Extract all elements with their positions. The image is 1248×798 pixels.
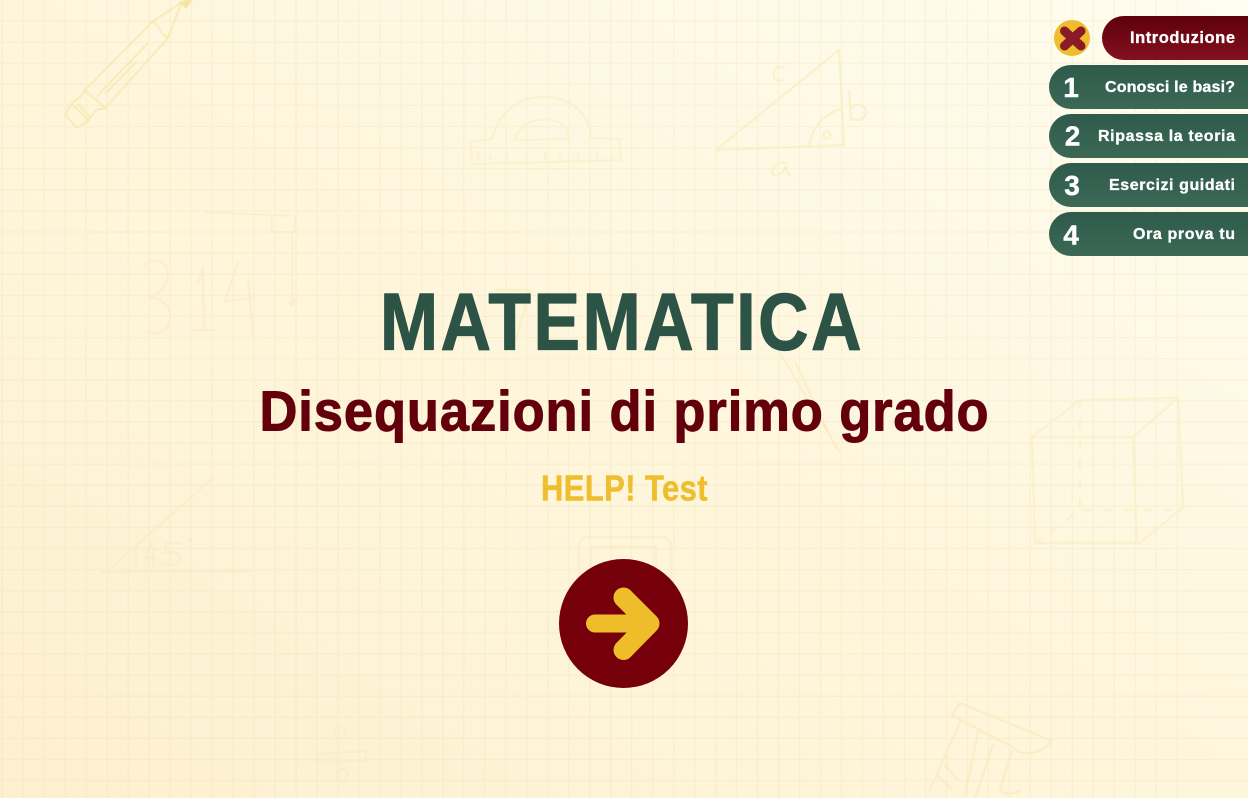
menu: 2 Ripassa la teoria: 2 bbox=[1065, 120, 1080, 152]
sketch: figures behind title bbox=[495, 290, 840, 453]
menu: Introduzione bbox=[1102, 16, 1248, 60]
sketch: protractor bbox=[471, 97, 621, 164]
menu: 4 Ora prova tu bbox=[1049, 212, 1248, 256]
title: MATEMATICA: MATEMATICA bbox=[380, 278, 864, 368]
menu: 3 Esercizi guidati: Esercizi guidati bbox=[1109, 177, 1235, 194]
menu: 2 Ripassa la teoria: Ripassa la teoria bbox=[1098, 128, 1235, 145]
menu: 2 Ripassa la teoria bbox=[1049, 114, 1248, 158]
menu: 1 Conosci le basi?: 1 bbox=[1063, 72, 1079, 103]
sketch: calculator bbox=[579, 537, 671, 607]
subtitle: Disequazioni di primo grado: Disequazioni di primo grado bbox=[260, 380, 990, 444]
menu: 4 Ora prova tu: 4 bbox=[1063, 220, 1079, 250]
icon: arrow bbox=[595, 598, 650, 650]
sketch: cube bbox=[1032, 398, 1183, 543]
menu: 1 Conosci le basi?: Conosci le basi? bbox=[1105, 79, 1235, 96]
icon: close button bbox=[1054, 20, 1090, 56]
button: next arrow bbox=[559, 559, 688, 688]
label: HELP! Test: HELP! Test bbox=[541, 468, 708, 508]
menu: 3 Esercizi guidati bbox=[1049, 163, 1248, 207]
menu: Introduzione: Introduzione bbox=[1130, 29, 1235, 47]
menu: 3 Esercizi guidati: 3 bbox=[1064, 170, 1080, 201]
sketch: fraction bbox=[317, 726, 366, 781]
sketch: 45 degree triangle bbox=[100, 478, 250, 573]
sketch: 3 1 4 numbers and arrow bbox=[143, 212, 296, 335]
sketch: pencil bbox=[65, 0, 192, 128]
menu: 1 Conosci le basi? bbox=[1049, 65, 1248, 109]
sketch: triangle abc bbox=[716, 50, 866, 175]
sketch: pi symbol bbox=[930, 703, 1052, 798]
menu: 4 Ora prova tu: Ora prova tu bbox=[1133, 226, 1235, 243]
